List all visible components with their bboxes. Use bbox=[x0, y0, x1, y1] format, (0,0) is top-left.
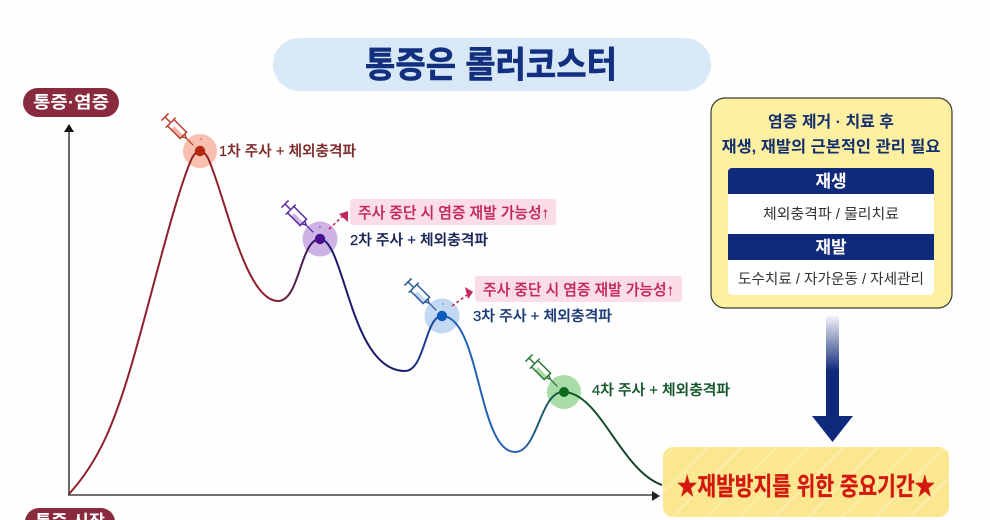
big down arrow bbox=[812, 316, 853, 442]
label: 4th injection: 4차 주사 + 체외충격파 bbox=[592, 382, 730, 399]
text: 재생 treatments: 체외충격파 / 물리치료 bbox=[763, 206, 899, 223]
x axis label: 통증 시작 bbox=[25, 508, 115, 520]
section: 재발 bbox=[728, 234, 934, 260]
panel heading: 염증 제거 · 치료 후 bbox=[768, 113, 894, 131]
callout: 2nd injection warning bbox=[350, 199, 556, 225]
icon: syringe 4 bbox=[524, 353, 562, 391]
callout: important period bbox=[663, 447, 949, 517]
x axis arrow bbox=[68, 491, 660, 501]
dashed arrow: 3rd injection warning bbox=[452, 287, 473, 306]
y axis arrow bbox=[64, 124, 74, 495]
marker dot: 3rd injection bbox=[437, 303, 447, 321]
marker dot: 1st injection bbox=[195, 138, 205, 156]
section: 재생 bbox=[728, 168, 934, 194]
icon: syringe 2 bbox=[280, 199, 318, 237]
halo: 4th injection bbox=[547, 375, 581, 409]
label: 2nd injection: 2차 주사 + 체외충격파 bbox=[350, 232, 488, 249]
callout: 2nd injection warning: 주사 중단 시 염증 재발 가능성↑ bbox=[358, 204, 549, 222]
title bbox=[273, 38, 711, 91]
roller coaster pain curve bbox=[69, 151, 662, 494]
panel: management bbox=[711, 98, 952, 308]
y axis label: 통증·염증: 통증·염증 bbox=[33, 93, 109, 112]
icon: syringe 1 bbox=[160, 112, 198, 150]
section: 재발: 재발 bbox=[815, 238, 847, 257]
panel subheading: 재생, 재발의 근본적인 관리 필요 bbox=[722, 138, 941, 156]
marker dot: 2nd injection bbox=[315, 226, 325, 244]
title: 통증은 롤러코스터 bbox=[365, 44, 617, 85]
label: 3rd injection: 3차 주사 + 체외충격파 bbox=[473, 308, 612, 325]
marker dot: 4th injection bbox=[559, 387, 569, 397]
white list background bbox=[728, 168, 934, 295]
halo: 2nd injection bbox=[302, 222, 338, 256]
y axis label: 통증·염증 bbox=[23, 88, 119, 117]
halo: 3rd injection bbox=[424, 298, 460, 334]
section: 재생: 재생 bbox=[815, 172, 847, 191]
text: 재발 treatments: 도수치료 / 자가운동 / 자세관리 bbox=[738, 271, 924, 288]
halo: 1st injection bbox=[183, 134, 217, 168]
callout: 3rd injection warning bbox=[475, 276, 682, 302]
dashed arrow: 2nd injection warning bbox=[329, 211, 348, 229]
icon: syringe 3 bbox=[403, 277, 441, 315]
callout: 3rd injection warning: 주사 중단 시 염증 재발 가능성↑ bbox=[483, 281, 674, 299]
label: 1st injection: 1차 주사 + 체외충격파 bbox=[219, 143, 356, 160]
callout: important period: ★재발방지를 위한 중요기간★ bbox=[677, 473, 935, 501]
